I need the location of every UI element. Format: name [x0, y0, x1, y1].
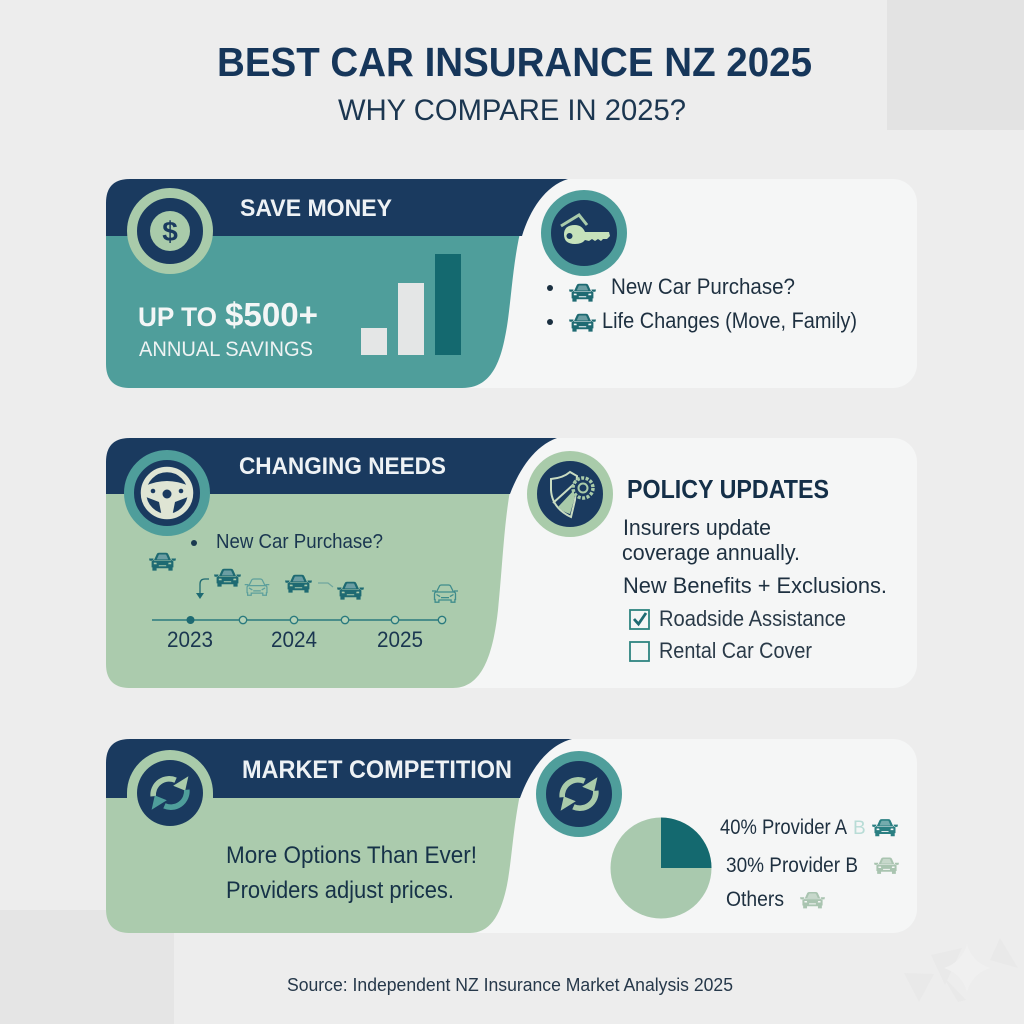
savings figure: $500+ — [225, 296, 318, 333]
list item: life changes: Life Changes (Move, Family) — [602, 308, 857, 333]
policy text — [622, 515, 887, 598]
list item: new car purchase: New Car Purchase? — [611, 274, 795, 299]
legend item: provider a: 40% Provider A — [720, 816, 847, 839]
arrow: right — [318, 583, 333, 587]
icon: dollar coin: $ — [162, 216, 178, 247]
legend item: provider a: B — [853, 818, 866, 839]
car icons on timeline — [149, 553, 458, 602]
legend item: others — [726, 888, 825, 911]
timeline: 2025 — [377, 627, 423, 652]
heading: save money: SAVE MONEY — [240, 195, 392, 222]
bar chart — [361, 254, 461, 355]
legend item: provider b: 30% Provider B — [726, 854, 858, 877]
competition text: Providers adjust prices. — [226, 877, 454, 904]
timeline: 2023 — [167, 627, 213, 652]
policy text: coverage annually. — [622, 540, 800, 565]
icon: dollar coin — [132, 193, 208, 269]
bullet: new car purchase: New Car Purchase? — [216, 531, 383, 553]
legend item: others: Others — [726, 888, 784, 911]
icon: refresh — [127, 750, 213, 826]
subtitle: WHY COMPARE IN 2025? — [338, 94, 686, 127]
header band — [106, 739, 572, 798]
savings figure: UP TO — [138, 302, 217, 332]
legend — [720, 816, 899, 911]
green body shape — [106, 480, 512, 688]
heading: market competition: MARKET COMPETITION — [242, 756, 512, 784]
checklist item: roadside assistance: Roadside Assistance — [659, 606, 846, 631]
heading: changing needs: CHANGING NEEDS — [239, 453, 446, 480]
green body shape — [106, 785, 522, 933]
panel: save money and life changes — [106, 179, 917, 388]
savings figure — [138, 296, 318, 333]
timeline — [152, 616, 446, 652]
panel: changing needs and policy updates — [106, 438, 917, 688]
title: BEST CAR INSURANCE NZ 2025 — [217, 39, 812, 85]
list item: new car purchase — [547, 274, 795, 302]
card background — [106, 438, 917, 688]
policy text: Insurers update — [623, 515, 771, 540]
pie chart — [610, 817, 712, 918]
policy text: New Benefits + Exclusions. — [623, 573, 887, 598]
competition text: More Options Than Ever! — [226, 842, 477, 869]
header band — [106, 179, 568, 236]
bullet list — [547, 274, 857, 333]
decorative sparkle — [904, 938, 1018, 1002]
checklist item: rental car cover: Rental Car Cover — [659, 638, 812, 663]
competition text — [226, 842, 477, 904]
heading: policy updates: POLICY UPDATES — [627, 474, 829, 504]
source note: Source: Independent NZ Insurance Market Analysis 2025 — [287, 975, 733, 995]
icon: steering wheel — [129, 455, 205, 531]
card background — [106, 739, 917, 933]
icon: house key — [546, 195, 622, 271]
panel: market competition — [106, 739, 917, 933]
timeline: 2024 — [271, 627, 317, 652]
icon: refresh ring — [541, 756, 617, 832]
savings label: ANNUAL SAVINGS — [139, 338, 313, 361]
header band — [106, 438, 557, 494]
card background — [106, 179, 917, 388]
teal body shape — [106, 225, 522, 388]
arrow: down-left — [196, 579, 209, 599]
icon: shield and gear — [532, 456, 608, 532]
